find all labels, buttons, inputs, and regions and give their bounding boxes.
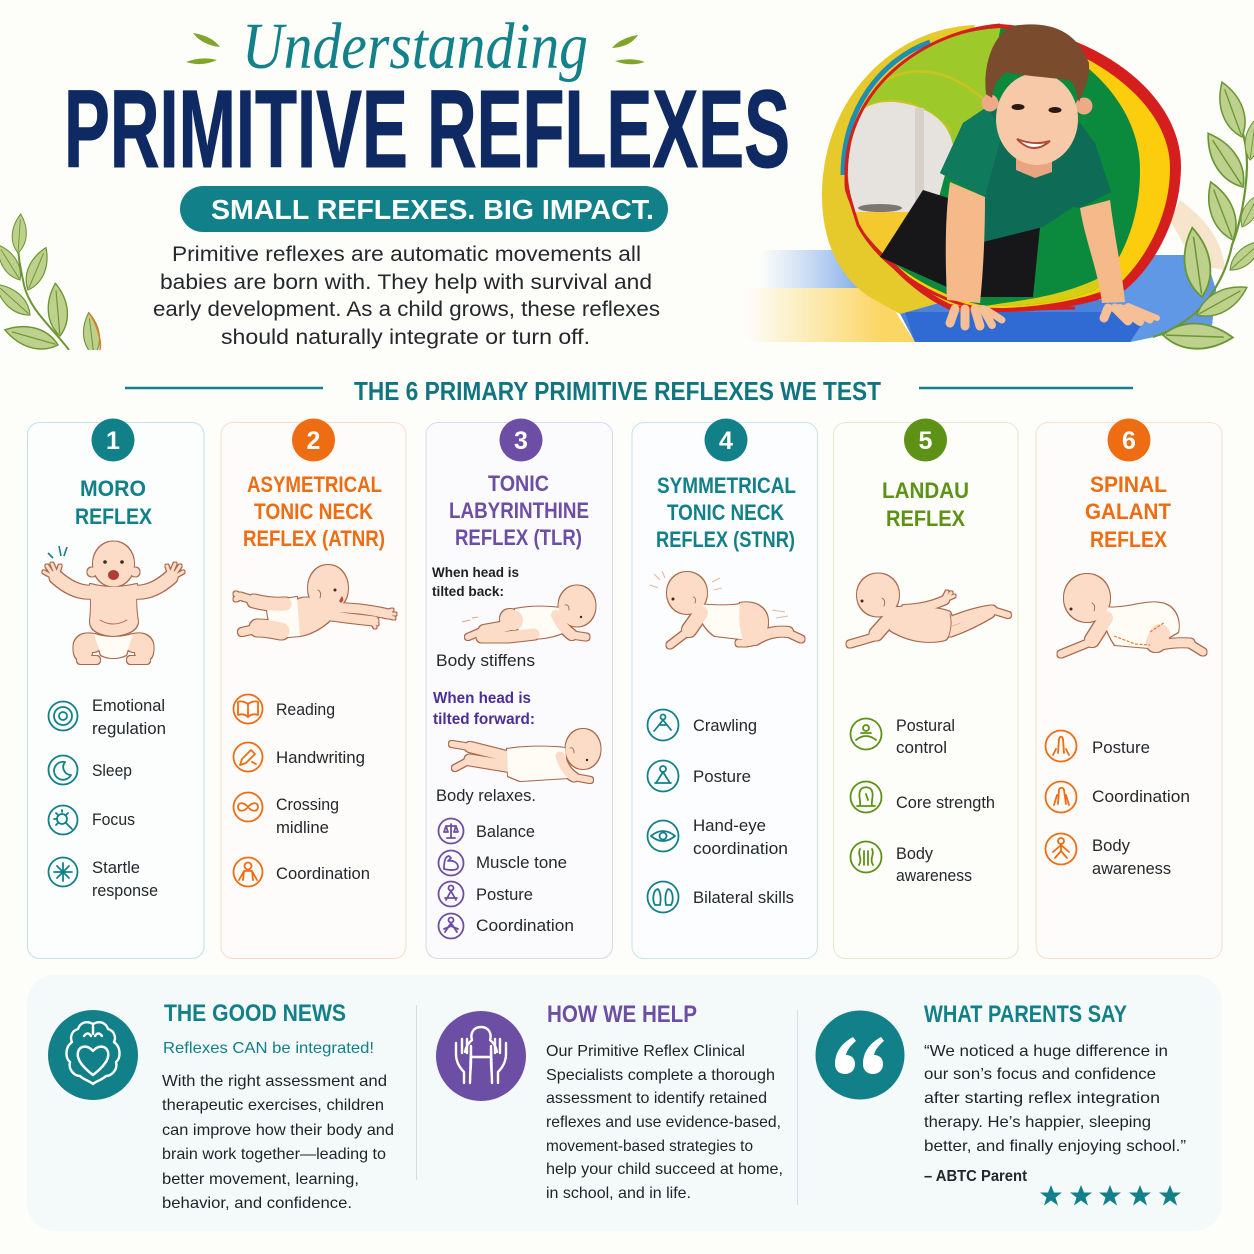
text: body relaxes: Body relaxes. xyxy=(436,787,536,805)
heading xyxy=(75,476,152,529)
item: body awareness: awareness xyxy=(1092,860,1171,878)
body text: therapeutic exercises, children xyxy=(162,1097,384,1114)
number badge: 1 xyxy=(106,427,120,455)
section: how we help xyxy=(436,1001,783,1202)
item: hand-eye coordination: coordination xyxy=(693,840,788,858)
tagline pill: SMALL REFLEXES. BIG IMPACT. xyxy=(211,194,654,225)
section heading: THE 6 PRIMARY PRIMITIVE REFLEXES WE TEST xyxy=(354,376,881,406)
heading: MORO xyxy=(80,476,146,501)
tunnel xyxy=(822,20,1181,314)
item: muscle tone xyxy=(438,850,567,876)
quote text xyxy=(924,1043,1186,1155)
item: postural control: Postural xyxy=(896,717,955,735)
item: sleep: Sleep xyxy=(92,762,132,780)
body text: brain work together—leading to xyxy=(162,1146,386,1163)
number badge xyxy=(92,418,134,462)
item: coordination: Coordination xyxy=(1092,788,1190,806)
heading xyxy=(449,471,589,550)
floor mats xyxy=(745,200,1225,342)
caption: head forward: tilted forward: xyxy=(433,711,535,728)
illustration: baby head forward xyxy=(452,729,600,781)
text: body stiffens: Body stiffens xyxy=(436,652,535,670)
heading: WHAT PARENTS SAY xyxy=(924,1001,1127,1028)
item: coordination xyxy=(1046,782,1190,812)
item: handwriting: Handwriting xyxy=(276,749,365,767)
item: crawling xyxy=(648,710,757,740)
caption: head forward: When head is xyxy=(433,690,531,707)
quote text: therapy. He’s happier, sleeping xyxy=(924,1114,1151,1131)
panel: ATNR xyxy=(221,418,406,958)
caption: head back: When head is xyxy=(432,564,519,580)
quote text: after starting reflex integration xyxy=(924,1090,1160,1107)
child xyxy=(880,24,1157,326)
heading: REFLEX xyxy=(1090,527,1167,552)
item: startle response: Startle xyxy=(92,859,140,877)
body text: With the right assessment and xyxy=(162,1073,387,1090)
heading: TONIC NECK xyxy=(667,500,784,525)
intro paragraph: Primitive reflexes are automatic movements all xyxy=(172,243,641,266)
item: crossing midline xyxy=(234,792,339,837)
section: what parents say xyxy=(816,1001,1186,1206)
heading: SPINAL xyxy=(1090,472,1167,497)
item: balance: Balance xyxy=(476,823,535,841)
item: posture xyxy=(438,882,533,906)
heading xyxy=(882,478,969,531)
subheading: Reflexes CAN be integrated! xyxy=(163,1040,374,1057)
hand left xyxy=(950,309,1002,326)
item: posture xyxy=(648,760,751,792)
star rating xyxy=(1040,1185,1181,1206)
number badge xyxy=(1108,418,1150,462)
item: bilateral skills: Bilateral skills xyxy=(693,889,794,907)
number badge: 3 xyxy=(514,427,528,455)
heading: HOW WE HELP xyxy=(547,1001,697,1028)
item: crossing midline: midline xyxy=(276,819,329,837)
quote text: “We noticed a huge difference in xyxy=(924,1043,1168,1060)
attribution: – ABTC Parent xyxy=(924,1168,1028,1185)
panel: bottom band xyxy=(27,975,1222,1231)
intro paragraph xyxy=(153,243,660,349)
accent dashes left xyxy=(186,33,220,64)
illustration: baby ATNR pose xyxy=(236,565,395,638)
photo: child crawling through play tunnel xyxy=(745,20,1225,342)
item: coordination: Coordination xyxy=(276,865,370,883)
quote text: better, and finally enjoying school.” xyxy=(924,1138,1186,1155)
illustration: baby startled xyxy=(44,542,183,660)
item: core strength xyxy=(850,782,995,812)
heading: REFLEX xyxy=(886,506,965,531)
number badge xyxy=(904,418,947,462)
heading: REFLEX xyxy=(75,504,152,529)
item: coordination: Coordination xyxy=(476,917,574,935)
quote text: our son’s focus and confidence xyxy=(924,1066,1156,1083)
body text: better movement, learning, xyxy=(162,1171,359,1188)
item: startle response xyxy=(48,858,158,900)
icon: brain with heart xyxy=(48,1010,138,1100)
caption: head back: tilted back: xyxy=(432,583,504,599)
item: coordination xyxy=(234,858,370,886)
number badge: 4 xyxy=(719,427,733,455)
body text: assessment to identify retained xyxy=(546,1090,767,1107)
heading: THE GOOD NEWS xyxy=(164,1000,346,1027)
intro paragraph: babies are born with. They help with survival and xyxy=(160,271,652,294)
item: posture: Posture xyxy=(1092,739,1150,757)
item: reading: Reading xyxy=(276,701,335,719)
item: emotional regulation: regulation xyxy=(92,720,166,738)
heading: TONIC xyxy=(488,471,549,496)
item: muscle tone: Muscle tone xyxy=(476,854,567,872)
tagline pill xyxy=(180,186,668,232)
item: posture: Posture xyxy=(476,886,533,904)
number badge xyxy=(704,418,748,462)
intro paragraph: early development. As a child grows, these reflexes xyxy=(153,298,660,321)
item: body awareness: Body xyxy=(1092,837,1131,855)
decorative branch right xyxy=(1153,79,1254,350)
decorative branch left xyxy=(0,214,102,357)
panel: Moro reflex xyxy=(28,418,204,958)
panel: STNR xyxy=(632,418,818,958)
body text xyxy=(162,1073,394,1212)
number badge: 2 xyxy=(307,427,320,455)
illustration: baby spinal galant pose xyxy=(1061,574,1203,654)
item: sleep xyxy=(48,756,132,784)
body text: reflexes and use evidence-based, xyxy=(546,1114,781,1131)
item: postural control xyxy=(850,717,955,757)
item: emotional regulation xyxy=(48,697,166,738)
caption: head back xyxy=(432,564,519,599)
section: the good news xyxy=(48,1000,394,1212)
number badge xyxy=(292,418,335,462)
title: Primitive Reflexes: PRIMITIVE REFLEXES xyxy=(64,68,790,191)
heading: LANDAU xyxy=(882,478,969,503)
item: reading xyxy=(234,694,335,724)
item: core strength: Core strength xyxy=(896,794,995,812)
heading: SYMMETRICAL xyxy=(657,473,796,498)
intro paragraph: should naturally integrate or turn off. xyxy=(221,326,590,349)
icon: hands supporting child xyxy=(436,1011,526,1101)
body text: behavior, and confidence. xyxy=(162,1195,352,1212)
item: bilateral skills xyxy=(648,882,794,912)
panel: Landau reflex xyxy=(834,418,1018,958)
heading: TONIC NECK xyxy=(254,499,373,524)
item: focus: Focus xyxy=(92,811,135,829)
heading: REFLEX (TLR) xyxy=(455,525,582,550)
item: crawling: Crawling xyxy=(693,717,757,735)
body text: movement-based strategies to xyxy=(546,1138,753,1155)
body text: Specialists complete a thorough xyxy=(546,1067,775,1084)
item: handwriting xyxy=(234,742,365,772)
accent dashes right xyxy=(612,35,645,64)
heading: REFLEX (STNR) xyxy=(656,527,795,552)
item: hand-eye coordination xyxy=(648,817,788,858)
item: coordination xyxy=(438,914,574,938)
item: posture xyxy=(1046,730,1150,762)
item: body awareness: Body xyxy=(896,845,934,863)
heading xyxy=(656,473,796,552)
panel: Spinal Galant reflex xyxy=(1036,418,1222,958)
body text: can improve how their body and xyxy=(162,1122,394,1139)
item: focus xyxy=(48,806,135,834)
number badge: 5 xyxy=(919,427,933,455)
hand right xyxy=(1104,306,1157,322)
item: postural control: control xyxy=(896,739,947,757)
item: posture: Posture xyxy=(693,768,751,786)
number badge: 6 xyxy=(1122,427,1136,455)
illustration: baby head back xyxy=(462,586,596,639)
panel: TLR xyxy=(426,418,612,958)
item: balance xyxy=(438,818,535,844)
heading xyxy=(243,472,385,551)
heading xyxy=(1085,472,1172,552)
heading: GALANT xyxy=(1085,499,1172,524)
item: body awareness xyxy=(850,842,972,885)
item: emotional regulation: Emotional xyxy=(92,697,165,715)
illustration: baby Landau pose xyxy=(850,574,1008,644)
item: body awareness: awareness xyxy=(896,867,972,885)
item: crossing midline: Crossing xyxy=(276,796,339,814)
body text: help your child succeed at home, xyxy=(546,1161,783,1178)
heading: REFLEX (ATNR) xyxy=(243,526,385,551)
item: startle response: response xyxy=(92,882,158,900)
body text: in school, and in life. xyxy=(546,1185,691,1202)
body text xyxy=(546,1043,783,1202)
item: body awareness xyxy=(1046,834,1171,878)
icon: quotation marks xyxy=(816,1010,904,1100)
number badge xyxy=(500,418,542,462)
illustration: baby STNR pose xyxy=(650,571,801,646)
heading: LABYRINTHINE xyxy=(449,498,589,523)
item: hand-eye coordination: Hand-eye xyxy=(693,817,766,835)
title: Understanding: Understanding xyxy=(242,10,588,83)
body text: Our Primitive Reflex Clinical xyxy=(546,1043,745,1060)
caption: head forward xyxy=(433,690,535,728)
heading: ASYMETRICAL xyxy=(247,472,382,497)
